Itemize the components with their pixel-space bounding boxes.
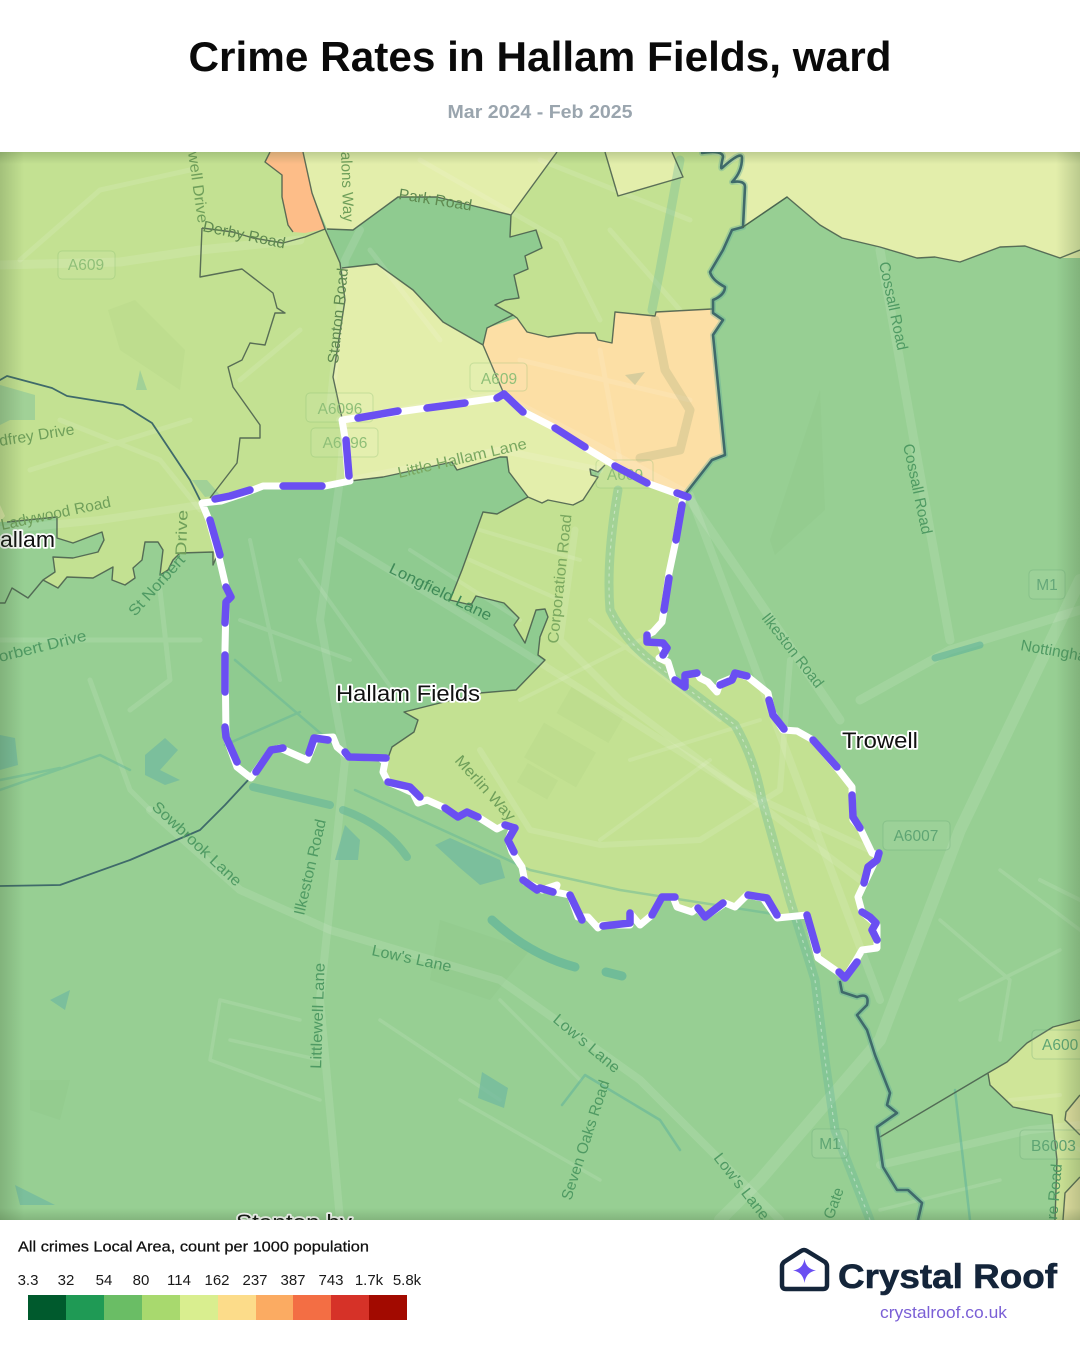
road network: [0, 160, 1080, 1220]
icon: house with star: [782, 1250, 827, 1289]
shield: B6003: B6003: [1031, 1138, 1076, 1155]
label: Ilkeston Road south: Ilkeston Road: [291, 818, 330, 917]
label: re Road: re Road: [1044, 1163, 1066, 1220]
place: Hallam (cropped): allam: [0, 527, 55, 552]
legend values: 3.3: [18, 1272, 38, 1289]
shield: A609 east: A609: [607, 467, 643, 484]
label: Ilkeston Road east: Ilkeston Road: [758, 610, 827, 691]
area: far-west pale pocket: [0, 505, 5, 522]
label: Corporation Road: Corporation Road: [545, 513, 576, 644]
label: alons Way: alons Way: [337, 152, 356, 222]
subtitle: date range: Mar 2024 - Feb 2025: [448, 101, 632, 122]
label: Low's Lane south: Low's Lane: [710, 1150, 772, 1224]
label: Seven Oaks Road: Seven Oaks Road: [559, 1078, 613, 1202]
legend colour scale: [28, 1295, 407, 1320]
shield: A600: A600: [1042, 1037, 1079, 1054]
label: St Norbert: St Norbert: [125, 551, 189, 620]
legend values: 743: [318, 1272, 344, 1289]
label: Stanton Road: Stanton Road: [325, 267, 352, 364]
legend values: 54: [96, 1272, 112, 1289]
brand url: crystalroof.co.uk: [880, 1304, 1008, 1322]
legend values: 80: [133, 1272, 149, 1289]
area: north-east pale-yellow zone: [702, 152, 1080, 262]
label: Gate: Gate: [821, 1185, 848, 1221]
shield: A600: [1032, 1030, 1080, 1059]
ward outline purple dashes: [210, 394, 879, 978]
area: south-east light zone: [988, 1020, 1080, 1220]
road name labels: [0, 150, 1080, 1224]
label: Littlewell Lane: Littlewell Lane: [308, 963, 329, 1069]
label: Ladywood Road: Ladywood Road: [0, 494, 112, 534]
legend values: 32: [58, 1272, 74, 1289]
area: south-east pale zone: [1063, 1095, 1080, 1220]
area: ward west green zone: [230, 606, 231, 607]
area: central pale zone: [333, 264, 614, 505]
legend: [18, 1240, 422, 1320]
water and canal features: [0, 160, 980, 1220]
area: salmon high-crime patch: [265, 152, 325, 233]
map edge vignette: [0, 152, 1080, 1220]
road number shields: [58, 251, 1080, 1159]
area: north pale zone: [303, 152, 557, 230]
shield: A6096 upper: A6096: [318, 401, 362, 418]
place: Stanton by (cropped): Stanton by: [236, 1210, 353, 1235]
shield: A609 centre: [470, 363, 527, 391]
canal dashed towpath: [609, 490, 870, 1220]
area: west light-green zone: [0, 152, 350, 603]
ward and area boundary lines: [0, 152, 1080, 1220]
shield: A6007: [883, 821, 950, 850]
shield: A609 west: [58, 251, 115, 279]
label: Little Hallam Lane: Little Hallam Lane: [396, 436, 529, 482]
label: Cossall Road south: Cossall Road: [899, 442, 935, 536]
label: Cossall Road north: Cossall Road: [875, 260, 910, 352]
shield: B6003: [1020, 1130, 1080, 1159]
label: Low's Lane west: Low's Lane: [370, 942, 453, 976]
river halo: [683, 152, 922, 1220]
label: Park Road: Park Road: [397, 186, 473, 215]
label: Merlin Way: Merlin Way: [451, 752, 519, 825]
area: ward east light-green zone: [380, 465, 878, 978]
shield: A609 east: [596, 460, 653, 488]
label: Derby Road: Derby Road: [201, 218, 287, 252]
darker land patches: [298, 252, 1051, 916]
legend values: 162: [204, 1272, 230, 1289]
shield: A6007: A6007: [894, 828, 938, 845]
place labels: [0, 527, 918, 1235]
shield: A609 west: A609: [68, 257, 104, 274]
shield: M1 south: [812, 1129, 848, 1158]
shield: A609 centre: A609: [481, 371, 517, 388]
legend values: 237: [242, 1272, 268, 1289]
label: Low's Lane centre: Low's Lane: [549, 1011, 623, 1077]
brand logo: [782, 1250, 1058, 1322]
brand name: Crystal Roof: [838, 1258, 1058, 1296]
river boundary: [0, 152, 922, 1220]
legend title: All crimes Local Area, count per 1000 population: [18, 1240, 369, 1256]
ward outline white base: [202, 394, 878, 978]
place: Trowell: Trowell: [842, 728, 918, 753]
legend values: [18, 1272, 422, 1289]
area: north light-green zone: [495, 152, 745, 343]
legend values: 387: [280, 1272, 306, 1289]
legend values: 1.7k: [355, 1272, 384, 1289]
shield: M1 south: M1: [819, 1136, 841, 1153]
shield: A6096 upper: [306, 393, 373, 422]
label: St Norbert Drive vertical: Drive: [173, 510, 192, 556]
label: well Drive: well Drive: [184, 150, 211, 224]
area: west green pocket: [0, 517, 104, 603]
shield: A6096 lower: [311, 428, 378, 457]
legend values: 114: [167, 1272, 191, 1289]
area: north-east pale box: [605, 152, 683, 196]
title: Crime Rates in Hallam Fields, ward: [188, 33, 892, 80]
shield: M1 north: M1: [1036, 577, 1058, 594]
label: Longfield Lane: Longfield Lane: [386, 560, 494, 625]
area: orange high-crime zone: [483, 309, 725, 497]
area: north green zone: [327, 197, 542, 345]
label: Godfrey Drive: dfrey Drive: [0, 421, 76, 450]
shield: A6096 lower: A6096: [323, 435, 367, 452]
place: Hallam Fields: Hallam Fields: [336, 681, 480, 706]
shield: M1 north: [1029, 570, 1065, 599]
label: Sowbrook Lane: Sowbrook Lane: [148, 798, 245, 890]
legend values: 5.8k: [393, 1272, 422, 1289]
